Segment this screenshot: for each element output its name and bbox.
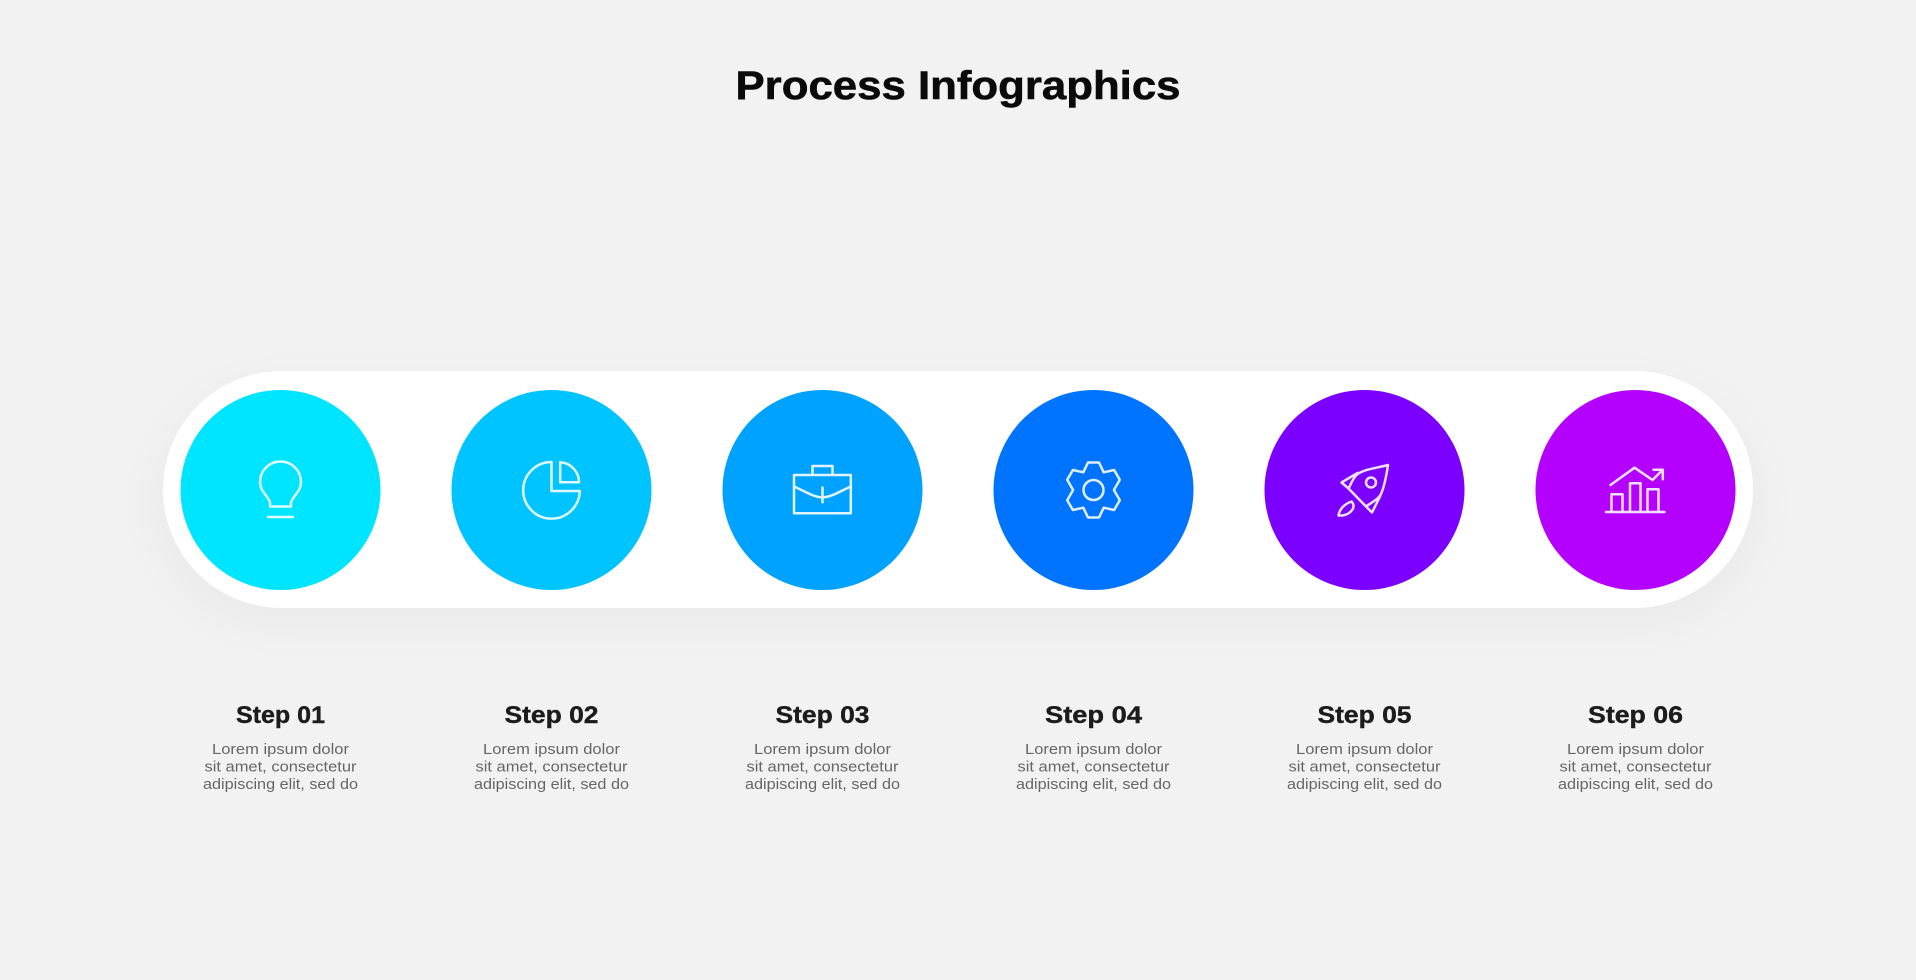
step 5 text: Step 05 (1318, 702, 1412, 729)
step 3 text: Lorem ipsum dolor (754, 741, 891, 758)
title: Process Infographics (736, 64, 1180, 108)
step 3 circle with briefcase icon (722, 390, 922, 590)
step 1 text: Lorem ipsum dolor (212, 741, 349, 758)
step 5 circle with rocket icon (1264, 390, 1464, 590)
step 4 text: Lorem ipsum dolor (1025, 741, 1162, 758)
step 6 circle with growth chart icon (1536, 390, 1736, 590)
step 3 text: adipiscing elit, sed do (745, 776, 900, 793)
step 5 text: adipiscing elit, sed do (1287, 776, 1442, 793)
step 5 text: Lorem ipsum dolor (1296, 741, 1433, 758)
step 2 text: Lorem ipsum dolor (483, 741, 620, 758)
step 2 text (474, 702, 629, 793)
panel: process track (158, 371, 1758, 623)
step 2 text: adipiscing elit, sed do (474, 776, 629, 793)
step 1 text: sit amet, consectetur (204, 758, 356, 776)
step 4 text: adipiscing elit, sed do (1016, 776, 1171, 793)
step 6 text: adipiscing elit, sed do (1558, 776, 1713, 793)
step 6 text: sit amet, consectetur (1560, 758, 1712, 776)
step 6 text (1558, 702, 1713, 793)
step 6 text: Lorem ipsum dolor (1567, 741, 1704, 758)
step 3 text: Step 03 (776, 702, 870, 729)
step 4 circle with gear icon (994, 390, 1194, 590)
step 6 text: Step 06 (1588, 702, 1683, 729)
step 2 circle with pie chart icon (452, 390, 652, 590)
step 3 text: sit amet, consectetur (746, 758, 898, 776)
step 4 text: sit amet, consectetur (1018, 758, 1170, 776)
step 5 text: sit amet, consectetur (1288, 758, 1440, 776)
step 2 text: Step 02 (504, 702, 598, 729)
step 1 circle with lightbulb icon (180, 390, 380, 590)
step 1 text: Step 01 (236, 702, 325, 729)
step 4 text: Step 04 (1045, 702, 1143, 729)
step 1 text: adipiscing elit, sed do (203, 776, 358, 793)
step 3 text (745, 702, 900, 793)
step 1 text (203, 702, 358, 793)
step 5 text (1287, 702, 1442, 793)
step 2 text: sit amet, consectetur (476, 758, 628, 776)
step 4 text (1016, 702, 1171, 793)
